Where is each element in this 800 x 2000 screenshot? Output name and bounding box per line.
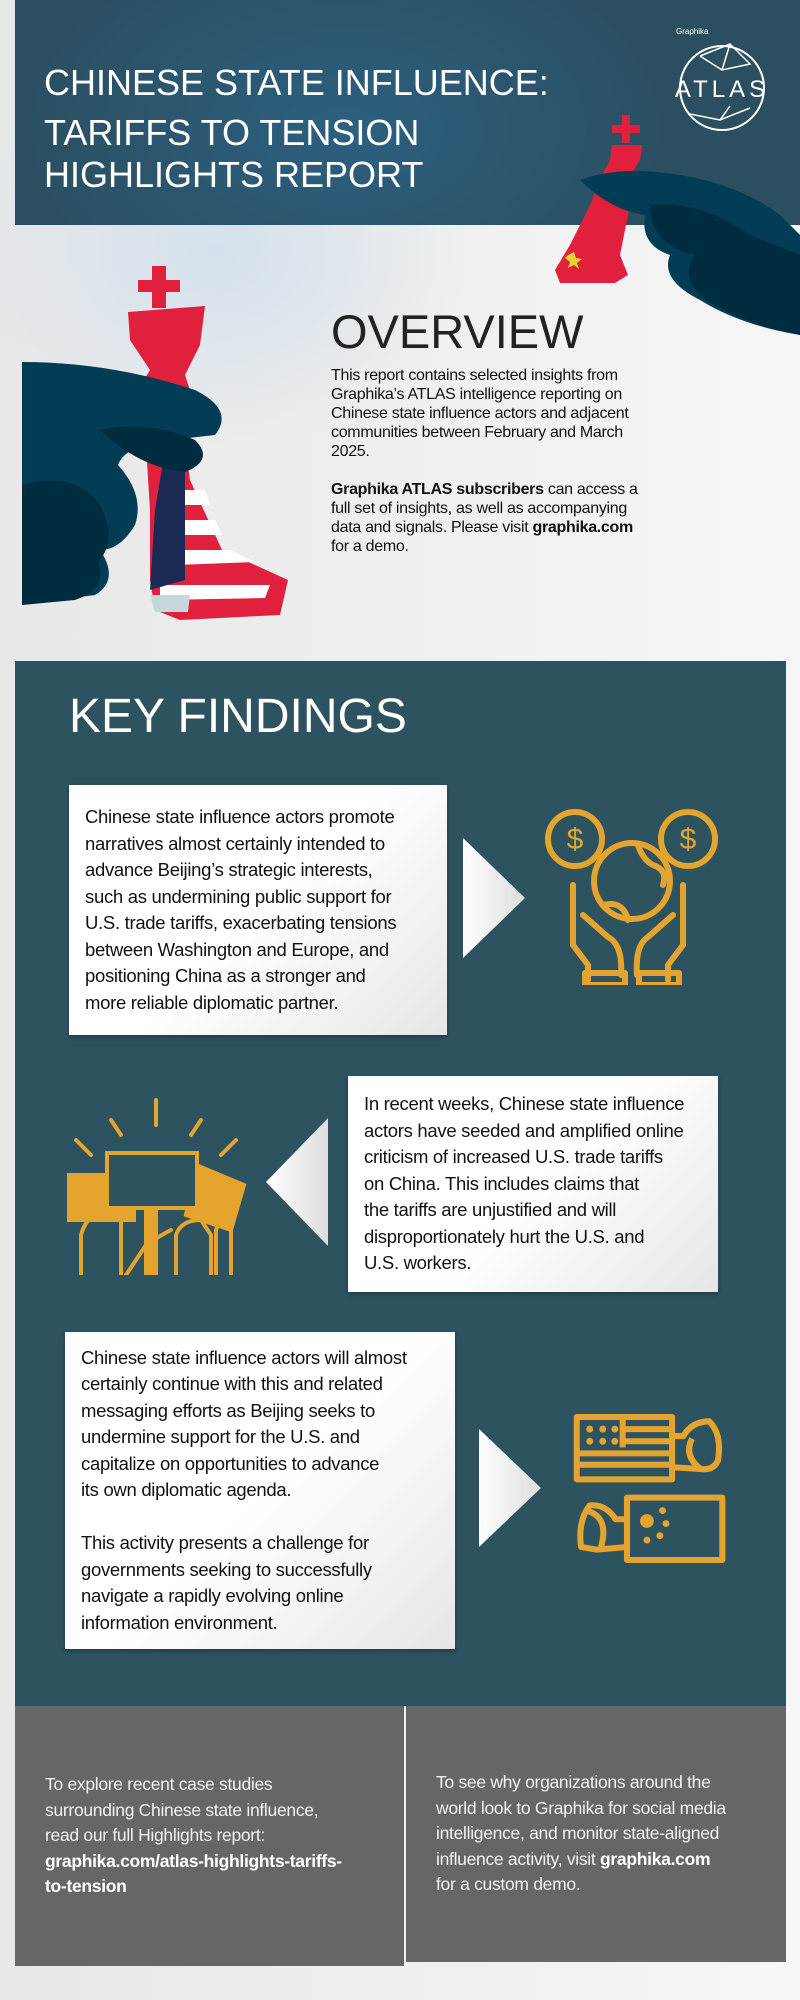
footer: demo: intelligence, and monitor state-aligned xyxy=(436,1823,719,1843)
footer: report link xyxy=(15,1706,404,1966)
overview text: data and signals. Please visit graphika.com xyxy=(331,519,633,536)
overview text: Graphika’s ATLAS intelligence reporting on xyxy=(331,386,622,403)
arrow 3 xyxy=(479,1429,541,1547)
finding 2 text box: criticism of increased U.S. trade tariffs xyxy=(364,1146,663,1167)
finding 1 text box: such as undermining public support for xyxy=(85,886,391,906)
finding 3 text box: undermine support for the U.S. and xyxy=(81,1426,360,1447)
logo: ATLAS: Graphika xyxy=(676,27,709,36)
finding 3 text box: capitalize on opportunities to advance xyxy=(81,1453,379,1474)
footer: report link: surrounding Chinese state influence, xyxy=(45,1800,318,1820)
finding 2 text box: U.S. workers. xyxy=(364,1252,471,1273)
footer: report link: to-tension xyxy=(45,1876,127,1896)
icon: hands holding globe and money: $ xyxy=(567,823,584,856)
arrow 2 (pointing left) xyxy=(266,1118,328,1246)
title xyxy=(44,62,549,195)
finding 2 text box: actors have seeded and amplified online xyxy=(364,1120,683,1141)
footer: demo: influence activity, visit graphika.com xyxy=(436,1849,710,1869)
overview text: full set of insights, as well as accompanying xyxy=(331,500,627,517)
icon: protest signs xyxy=(67,1098,246,1275)
finding 1 text box: between Washington and Europe, and xyxy=(85,938,389,960)
finding 2 text box: the tariffs are unjustified and will xyxy=(364,1199,616,1220)
icon: hands holding globe and money: $ xyxy=(680,823,697,856)
heading: key findings: KEY FINDINGS xyxy=(69,690,407,743)
finding 1 text box: narratives almost certainly intended to xyxy=(85,832,385,854)
finding 3 text box: governments seeking to successfully xyxy=(81,1559,372,1580)
footer: report link: graphika.com/atlas-highlights-tariffs- xyxy=(45,1851,342,1871)
finding 3 text box: This activity presents a challenge for xyxy=(81,1532,369,1553)
footer: demo: world look to Graphika for social media xyxy=(436,1798,726,1818)
finding 1 text box xyxy=(69,785,447,1035)
finding 1 text box: positioning China as a stronger and xyxy=(85,965,366,986)
finding 3 text box xyxy=(65,1332,455,1649)
finding 3 text box: certainly continue with this and related xyxy=(81,1373,383,1394)
overview heading: OVERVIEW xyxy=(331,305,583,358)
finding 3 text box: navigate a rapidly evolving online xyxy=(81,1585,343,1606)
finding 2 text box: In recent weeks, Chinese state influence xyxy=(364,1093,684,1114)
overview text: 2025. xyxy=(331,443,370,460)
logo: ATLAS: ATLAS xyxy=(675,76,769,103)
icon: hands holding globe and money xyxy=(545,809,718,985)
overview text: This report contains selected insights from xyxy=(331,367,618,384)
header band xyxy=(15,0,800,225)
finding 3 text box: messaging efforts as Beijing seeks to xyxy=(81,1400,375,1421)
finding 2 text box: on China. This includes claims that xyxy=(364,1173,639,1194)
title: TARIFFS TO TENSION xyxy=(44,112,419,153)
finding 3 text box: its own diplomatic agenda. xyxy=(81,1479,291,1500)
title: CHINESE STATE INFLUENCE: xyxy=(44,62,549,103)
footer: report link: To explore recent case studies xyxy=(45,1774,272,1794)
finding 2 text box: disproportionately hurt the U.S. and xyxy=(364,1226,644,1247)
icon: US and China flags handshake xyxy=(574,1414,726,1563)
footer: report link: read our full Highlights report: xyxy=(45,1825,265,1845)
finding 1 text box: more reliable diplomatic partner. xyxy=(85,992,338,1012)
title: HIGHLIGHTS REPORT xyxy=(44,154,423,195)
footer: demo: To see why organizations around the xyxy=(436,1772,711,1792)
finding 1 text box: advance Beijing’s strategic interests, xyxy=(85,859,373,880)
finding 3 text box: information environment. xyxy=(81,1612,277,1633)
logo: ATLAS xyxy=(675,27,769,131)
finding 3 text box: Chinese state influence actors will almost xyxy=(81,1347,407,1368)
overview text xyxy=(331,367,638,555)
illustration: hand with Chinese king xyxy=(555,115,800,335)
footer: demo xyxy=(406,1706,786,1962)
overview text: for a demo. xyxy=(331,538,409,555)
overview text: Graphika ATLAS subscribers can access a xyxy=(331,481,638,498)
finding 1 text box: Chinese state influence actors promote xyxy=(85,806,394,827)
finding 2 text box xyxy=(348,1076,718,1292)
panel: key findings xyxy=(15,661,786,1706)
arrow 1 xyxy=(463,838,525,958)
overview text: Chinese state influence actors and adjacent xyxy=(331,405,629,422)
footer: demo: for a custom demo. xyxy=(436,1874,580,1894)
overview text: communities between February and March xyxy=(331,424,623,441)
finding 1 text box: U.S. trade tariffs, exacerbating tensions xyxy=(85,912,396,933)
illustration: hand with US king xyxy=(22,266,288,620)
